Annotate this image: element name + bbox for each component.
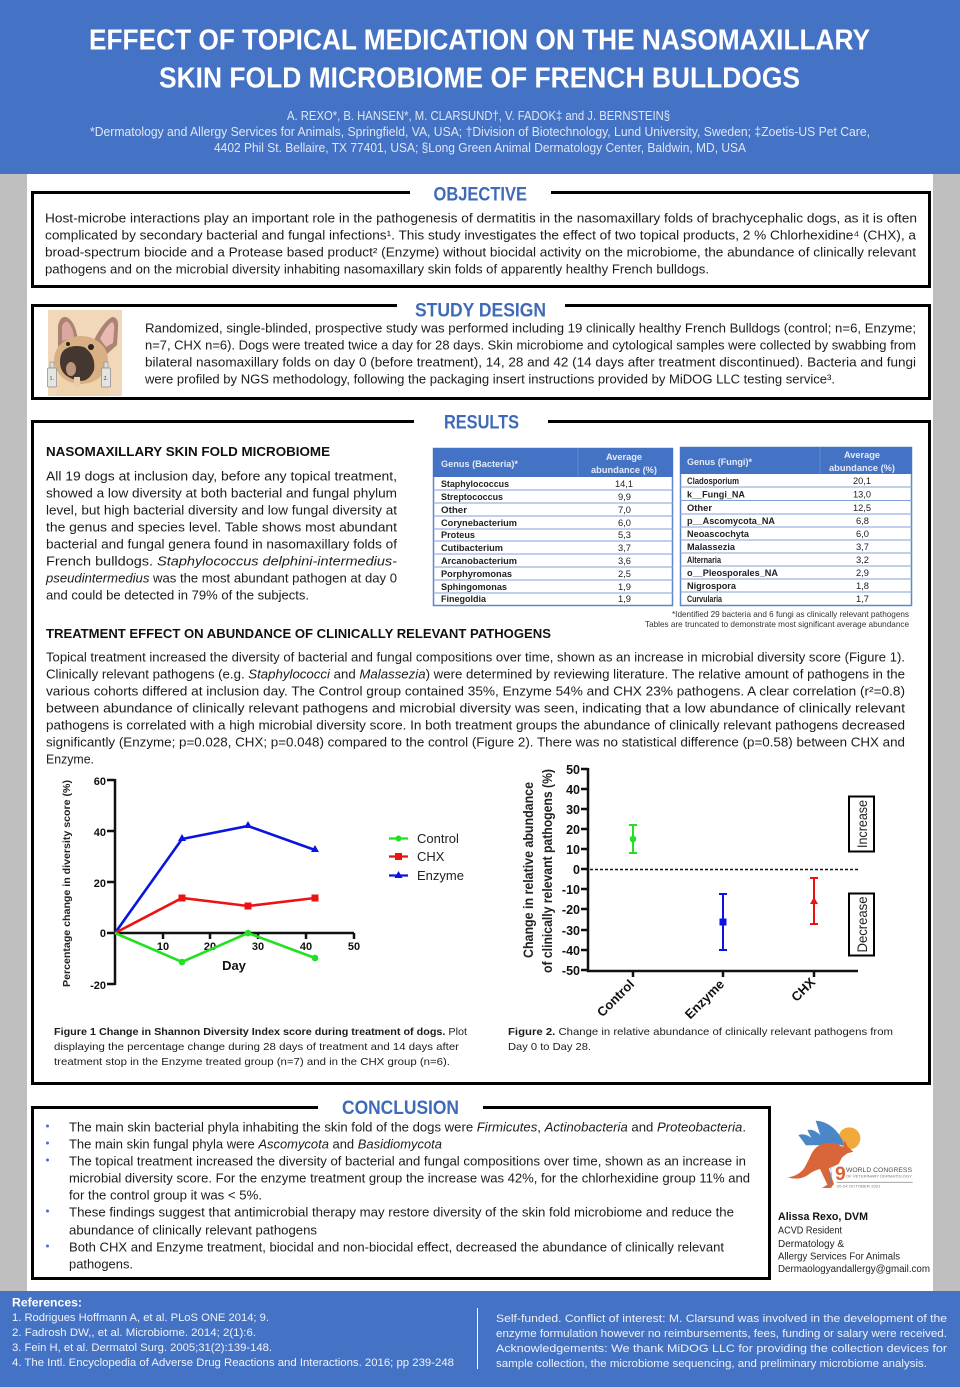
funding and acknowledgements: Acknowledgements: We thank MiDOG LLC for providing the collection devices for (496, 1343, 947, 1355)
caption: figure 1: Figure 1 Change in Shannon Diversity Index score during treatment of dogs. Plot (54, 1026, 467, 1038)
category labels: Control (594, 977, 637, 1020)
table: fungi: 6,0 (856, 529, 869, 540)
table footnote (645, 609, 909, 629)
category labels: CHX (788, 974, 818, 1005)
chart: figure 2 error bars: 50 (566, 763, 580, 777)
icon: world congress logo with kangaroo: WORLD CONGRESS (846, 1167, 912, 1174)
icon: world congress logo with kangaroo: SYDNEY (828, 1167, 833, 1188)
chart: figure 1 line chart: 60 (94, 776, 106, 788)
study design text: were profiled by NGS methodology, following the packaging insert instructions provided by MiDOG LLC testing service³. (144, 372, 835, 386)
chart: figure 1 line chart: Day (222, 958, 247, 973)
authors and affiliations: A. REXO*, B. HANSEN*, M. CLARSUND†, V. FADOK‡ and J. BERNSTEIN§ (287, 109, 670, 123)
table: bacteria: 3,6 (618, 556, 631, 567)
heading: results: RESULTS (444, 412, 519, 434)
subheading: treatment effect: TREATMENT EFFECT ON ABUNDANCE OF CLINICALLY RELEVANT PATHOGENS (46, 626, 551, 641)
treatment effect text: Clinically relevant pathogens (e.g. Staphylococci and Malassezia ) were determined by reviewing literature. The relative amount of pathogens in the (46, 668, 905, 682)
conclusion bullets: The topical treatment increased the diversity of bacterial and fungal compositions over time, shown as an increase in (69, 1154, 746, 1168)
table footnote: Tables are truncated to demonstrate most significant average abundance (645, 619, 909, 629)
y axis title: of clinically relevant pathogens (%) (539, 769, 555, 973)
table: fungi: Neoascochyta (687, 529, 750, 540)
microbiome text: level, but high bacterial diversity and low fungal diversity at (46, 504, 398, 518)
label box: decrease: Decrease (855, 896, 870, 952)
icon: French bulldog photo with two product bottles (48, 310, 122, 396)
conclusion bullets: The main skin fungal phyla were Ascomycota and Basidiomycota (69, 1138, 442, 1152)
study design text: Randomized, single-blinded, prospective study was performed including 19 clinically healthy French Bulldogs (control; n=6, Enzyme; (145, 322, 916, 336)
treatment effect text (46, 650, 906, 766)
table: bacteria: Staphylococcus (441, 479, 509, 490)
objective text: broad-spectrum biocide and a Protease based product² (Enzyme) without biocidal activity on the microbiome, the abundance of clinically relevant (45, 246, 917, 260)
funding and acknowledgements: sample collection, the microbiome sequencing, and preliminary microbiome analysis. (496, 1358, 927, 1370)
objective text: Host-microbe interactions play an important role in the pathogenesis of dermatitis in the nasomaxillary folds of brachycephalic dogs, as it is often (45, 212, 917, 226)
author contact block: Dermaologyandallergy@gmail.com (778, 1264, 930, 1275)
table: bacteria: Proteus (441, 530, 475, 541)
chart: figure 2 error bars: 40 (566, 783, 580, 797)
table: fungi: abundance (%) (829, 463, 895, 474)
microbiome text: French bulldogs. Staphylococcus delphini-intermedius- (46, 554, 397, 568)
study design text (144, 322, 916, 386)
table: bacteria: 1,9 (618, 594, 631, 605)
table: bacteria: 3,7 (618, 543, 631, 554)
chart: figure 1 line chart: 50 (348, 941, 360, 953)
microbiome text: the genus and species level. Table shows most abundant (46, 520, 398, 534)
icon: world congress logo with kangaroo: OF VETERINARY DERMATOLOGY (846, 1174, 912, 1179)
chart: figure 2 error bars (520, 763, 874, 1022)
table: bacteria: 5,3 (618, 530, 631, 541)
chart: figure 2 error bars: 30 (566, 803, 580, 817)
table: bacteria: Finegoldia (441, 594, 487, 605)
chart: figure 2 error bars: -10 (562, 883, 580, 897)
chart: figure 1 line chart (61, 776, 464, 992)
table: fungi: 2,9 (856, 568, 869, 579)
table: fungi: 3,7 (856, 542, 869, 553)
caption: figure 2 (508, 1026, 893, 1053)
panel: conclusion (32, 1097, 770, 1278)
legend (389, 831, 464, 883)
table: fungi: Curvularia (687, 594, 723, 605)
conclusion bullets (46, 1120, 750, 1272)
series: CHX point (810, 878, 818, 924)
title (89, 24, 870, 94)
chart: figure 1 line chart: 30 (252, 941, 264, 953)
table: fungi: Cladosporium (687, 476, 739, 487)
microbiome text (45, 470, 398, 602)
table: fungi: Average (844, 450, 880, 461)
table: bacteria (433, 448, 673, 606)
chart: figure 1 line chart: -20 (90, 980, 106, 992)
table: bacteria: 1,9 (618, 582, 631, 593)
table: fungi: Other (687, 503, 712, 514)
author contact block: Allergy Services For Animals (778, 1252, 900, 1262)
icon: French bulldog photo with two product bottles: 2. (104, 376, 108, 382)
chart: figure 2 error bars: 10 (566, 843, 580, 857)
table: fungi (680, 447, 912, 606)
title: SKIN FOLD MICROBIOME OF FRENCH BULLDOGS (159, 62, 800, 94)
references: 3. Fein H, et al. Dermatol Surg. 2005;31(2):139-148. (12, 1342, 272, 1354)
microbiome text: pseudintermedius was the most abundant pathogen at day 0 (45, 572, 397, 586)
panel: results (32, 412, 930, 1084)
funding and acknowledgements: Self-funded. Conflict of interest: M. Clarsund was involved in the development of the (496, 1313, 947, 1325)
table: fungi: 6,8 (856, 516, 869, 527)
chart: figure 1 line chart: 40 (94, 827, 106, 839)
authors and affiliations: *Dermatology and Allergy Services for Animals, Springfield, VA, USA; †Division of Biotechnology, Lund University, Sweden; ‡Zoetis-US Pet Care, (90, 125, 870, 139)
label box: increase: Increase (855, 800, 870, 848)
chart: figure 1 line chart: 20 (204, 941, 216, 953)
treatment effect text: various cohorts differed at inclusion day. The Control group contained 35%, Enzyme 54% and CHX 23% pathogens. A clear correlation (r²=0.8) (46, 684, 905, 698)
treatment effect text: Enzyme. (46, 752, 94, 766)
table: bacteria: Streptococcus (441, 492, 503, 503)
author contact block: Dermatology & (778, 1239, 844, 1250)
legend: CHX (417, 849, 445, 864)
author contact block (778, 1211, 930, 1275)
caption: figure 1: displaying the percentage change during 28 days of treatment and 14 days after (54, 1041, 460, 1053)
microbiome text: and could be detected in 79% of the subjects. (46, 588, 309, 602)
series: enzyme point (719, 894, 727, 950)
header banner (0, 0, 960, 174)
category labels: Enzyme (682, 977, 727, 1022)
category labels (594, 974, 818, 1022)
table: bacteria: 14,1 (615, 479, 633, 490)
references: 1. Rodrigues Hoffmann A, et al. PLoS ONE 2014; 9. (12, 1312, 269, 1324)
table: fungi: k__Fungi_NA (687, 490, 745, 500)
caption: figure 2: Day 0 to Day 28. (508, 1041, 591, 1053)
table: bacteria: Other (441, 505, 467, 516)
y axis title: Percentage change in diversity score (%) (61, 780, 73, 987)
conclusion bullets: microbial diversity score. For the enzyme treatment group the increase was 42%, for the chlorhexidine group 11% and (69, 1172, 750, 1186)
table: bacteria: Porphyromonas (441, 569, 512, 580)
chart: figure 1 line chart: 10 (157, 941, 169, 953)
icon: world congress logo with kangaroo: 9 (835, 1164, 846, 1185)
study design text: n=7, CHX n=6). Dogs were treated twice a day for 28 days. Skin microbiome and cytological samples were collected by swabbing from (145, 338, 916, 352)
chart: figure 2 error bars: 0 (573, 863, 580, 877)
table: bacteria: Corynebacterium (441, 518, 517, 529)
table: fungi: 1,8 (856, 581, 869, 592)
table: fungi: o__Pleosporales_NA (687, 568, 778, 579)
footer band (0, 1291, 960, 1387)
chart: figure 1 line chart: 40 (300, 941, 312, 953)
chart: figure 2 error bars: -40 (562, 944, 580, 958)
table: bacteria: Genus (Bacteria)* (441, 459, 518, 470)
authors and affiliations: 4402 Phil St. Bellaire, TX 77401, USA; §Long Green Animal Dermatology Center, Baldwin, MD, USA (214, 141, 747, 155)
icon: world congress logo with kangaroo: 20-24 OCTOBER 2021 (837, 1184, 881, 1188)
table: fungi: 3,2 (856, 555, 869, 566)
table: bacteria: Cutibacterium (441, 543, 503, 554)
legend: Enzyme (417, 868, 464, 883)
conclusion bullets: Both CHX and Enzyme treatment, biocidal and non-biocidal effect, decreased the abundance of clinically relevant (69, 1240, 725, 1254)
table: bacteria: 2,5 (618, 569, 631, 580)
heading: conclusion: CONCLUSION (342, 1097, 459, 1119)
panel: study design (32, 299, 930, 398)
label box: increase (849, 796, 874, 852)
series: control point (629, 825, 637, 853)
caption: figure 2: Figure 2. Change in relative abundance of clinically relevant pathogens from (508, 1026, 893, 1038)
funding and acknowledgements (496, 1313, 947, 1370)
conclusion bullets: for the control group it was < 5%. (69, 1188, 262, 1202)
treatment effect text: significantly (Enzyme; p=0.028, CHX; p=0.048) compared to the control (Figure 2). There was no statistical difference (p=0.58) between CHX and (46, 736, 905, 750)
table: fungi: 1,7 (856, 594, 869, 605)
references: References: (12, 1298, 82, 1310)
references: 2. Fadrosh DW,, et al. Microbiome. 2014; 2(1):6. (12, 1327, 256, 1339)
table footnote: *Identified 29 bacteria and 6 fungi as clinically relevant pathogens (672, 609, 909, 619)
treatment effect text: pathogens is correlated with a high microbial diversity score. In both treatment groups the abundance of clinically relevant pathogens decreased (46, 718, 905, 732)
series: CHX (115, 894, 318, 933)
treatment effect text: between abundance of clinically relevant pathogens and microbial diversity was seen, indicating that a low abundance of clinically relevant (46, 702, 906, 716)
author contact block: ACVD Resident (778, 1226, 842, 1236)
series: control (115, 930, 318, 965)
table: bacteria: 9,9 (618, 492, 631, 503)
conclusion bullets: abundance of clinically relevant pathogens (69, 1224, 317, 1238)
table: fungi: 20,1 (853, 476, 871, 487)
heading: study design: STUDY DESIGN (415, 300, 546, 322)
table: bacteria: Arcanobacterium (441, 556, 517, 567)
chart: figure 2 error bars: -20 (562, 903, 580, 917)
y axis title (520, 769, 555, 973)
table: fungi: p__Ascomycota_NA (687, 516, 775, 527)
conclusion bullets: The main skin bacterial phyla inhabiting the skin fold of the dogs were Firmicutes, Actinobacteria and Proteobacteria . (69, 1120, 746, 1134)
objective text (45, 212, 917, 276)
y axis title: Change in relative abundance (520, 782, 536, 958)
treatment effect text: Topical treatment increased the diversity of bacterial and fungal compositions over time, shown as an increase in microbial diversity score (Figure 1). (46, 650, 905, 664)
title: EFFECT OF TOPICAL MEDICATION ON THE NASOMAXILLARY (89, 24, 870, 56)
table: bacteria: Sphingomonas (441, 582, 507, 593)
objective text: pathogens and on the microbial diversity inhabiting nasomaxillary skin folds of apparently healthy French bulldogs. (45, 262, 709, 276)
table: fungi: Malassezia (687, 542, 736, 553)
chart: figure 2 error bars: 20 (566, 823, 580, 837)
table: bacteria: 6,0 (618, 518, 631, 529)
author contact block: Alissa Rexo, DVM (778, 1211, 868, 1223)
conclusion bullets: These findings suggest that antimicrobial therapy may restore diversity of the skin fold microbiome and reduce the (69, 1206, 734, 1220)
study design text: bilateral nasomaxillary folds on day 0 (before treatment), 14, 28 and 42 (14 days after treatment discontinued). Bacteria and fungi (145, 356, 916, 370)
authors and affiliations (90, 109, 870, 155)
table: fungi: Alternaria (687, 555, 722, 566)
subheading: nasomaxillary skin fold microbiome: NASOMAXILLARY SKIN FOLD MICROBIOME (46, 444, 330, 459)
caption: figure 1 (54, 1026, 467, 1068)
chart: figure 2 error bars: -50 (562, 964, 580, 978)
table: bacteria: 7,0 (618, 505, 631, 516)
table: bacteria: abundance (%) (591, 465, 657, 476)
icon: world congress logo with kangaroo (788, 1121, 913, 1188)
microbiome text: All 19 dogs at inclusion day, before any topical treatment, (46, 470, 397, 484)
legend: Control (417, 831, 459, 846)
table: fungi: Nigrospora (687, 581, 737, 592)
panel: objective (32, 184, 930, 286)
microbiome text: bacterial and fungal genera found in nasomaxillary folds of (46, 538, 398, 552)
references: 4. The Intl. Encyclopedia of Adverse Drug Reactions and Interactions. 2016; pp 239-248 (12, 1357, 454, 1369)
table: fungi: 13,0 (853, 490, 871, 500)
label box: decrease (849, 894, 874, 956)
chart: figure 1 line chart: 20 (94, 878, 106, 890)
icon: French bulldog photo with two product bottles: 1. (50, 376, 54, 382)
microbiome text: showed a low diversity at both bacterial and fungal phylum (46, 486, 397, 500)
table: fungi: 12,5 (853, 503, 871, 514)
heading: objective: OBJECTIVE (434, 184, 527, 206)
series: enzyme (115, 821, 319, 933)
chart: figure 1 line chart: 0 (100, 928, 106, 940)
table: bacteria: Average (606, 452, 642, 463)
funding and acknowledgements: enzyme formulation however no reimbursements, fees, funding or salary were received. (496, 1328, 947, 1340)
objective text: complicated by secondary bacterial and fungal infections¹. This study investigates the effect of two topical products, 2 % Chlorhexidine⁴ (CHX), a (45, 228, 916, 242)
chart: figure 2 error bars: -30 (562, 924, 580, 938)
caption: figure 1: treatment stop in the Enzyme treated group (n=7) and in the CHX group (n=6). (54, 1056, 450, 1068)
table: fungi: Genus (Fungi)* (687, 457, 752, 468)
conclusion bullets: pathogens. (69, 1258, 133, 1272)
references (12, 1298, 454, 1369)
